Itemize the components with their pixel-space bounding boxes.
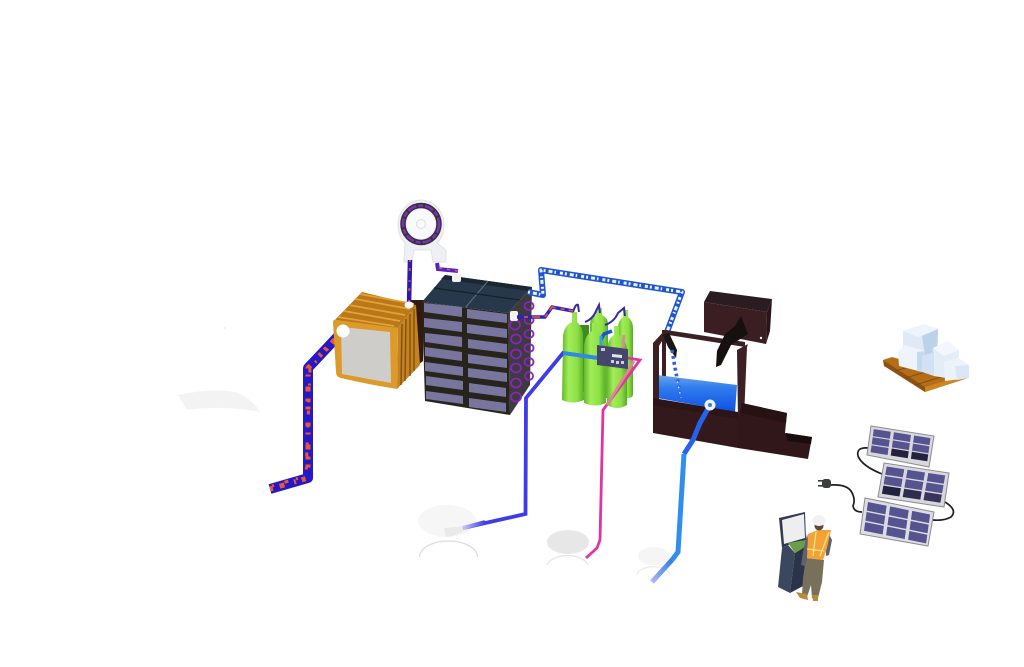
control panel [597,345,628,369]
solar panel: bottom [860,498,934,546]
worker [796,515,832,601]
block: back [903,324,938,366]
tank: front middle [584,323,606,406]
ghost base: blue outlet [418,505,478,557]
sky outlet fitting [704,400,716,410]
battery stack [422,274,534,415]
worker legs [802,558,824,598]
machine top box [704,291,772,344]
tank: back middle [590,308,608,398]
water tank [657,375,737,412]
frame posts [653,330,748,418]
tank: back right [618,310,633,399]
right nozzle [716,316,748,367]
ghost base: sky outlet [637,547,670,575]
gas tanks [562,308,633,408]
sky outlet line [652,407,709,582]
block: right [922,341,959,380]
machine base [653,398,812,459]
solar panel: top [867,426,934,467]
solar cables [830,448,953,520]
worker arms [801,532,832,566]
block: front right [944,358,969,381]
intake pipe [270,333,341,489]
frame back bars [662,330,745,380]
pallet [883,357,968,392]
tank connection hoses [573,305,625,349]
purple and red pipe [517,307,573,317]
heat exchanger box [333,292,424,389]
tank: front right [607,326,627,408]
battery cells: right column [467,309,507,412]
pump to stack pipe [437,263,458,271]
speckled water pipe [528,270,682,332]
blue outlet line [463,353,598,528]
pump to exchanger pipe [404,260,414,308]
blue outlet fading tip [463,522,485,528]
tank: back left [578,325,589,392]
side coils [510,302,534,402]
pink outlet line [586,358,640,558]
control kiosk [778,512,806,593]
falling water drops [672,350,681,398]
battery cells: left column [424,303,463,404]
pallet with ice blocks [883,324,969,392]
left nozzle [663,333,677,358]
worker head [814,522,824,530]
worker vest [807,530,831,560]
ghost base: pink outlet [547,530,589,565]
pump [398,200,446,262]
stack top fitting [452,274,461,282]
blue overlay across tanks [563,353,598,358]
electrolysis machine [653,291,812,459]
block: left [898,345,925,372]
worker boots [796,592,818,601]
tank: front left [562,312,584,402]
plug [818,479,831,488]
solar panel: middle [878,463,949,507]
box inlet fitting [336,324,350,338]
ghost shadow: left [178,327,260,412]
stack side fitting [510,311,518,321]
worker helmet [812,515,826,526]
